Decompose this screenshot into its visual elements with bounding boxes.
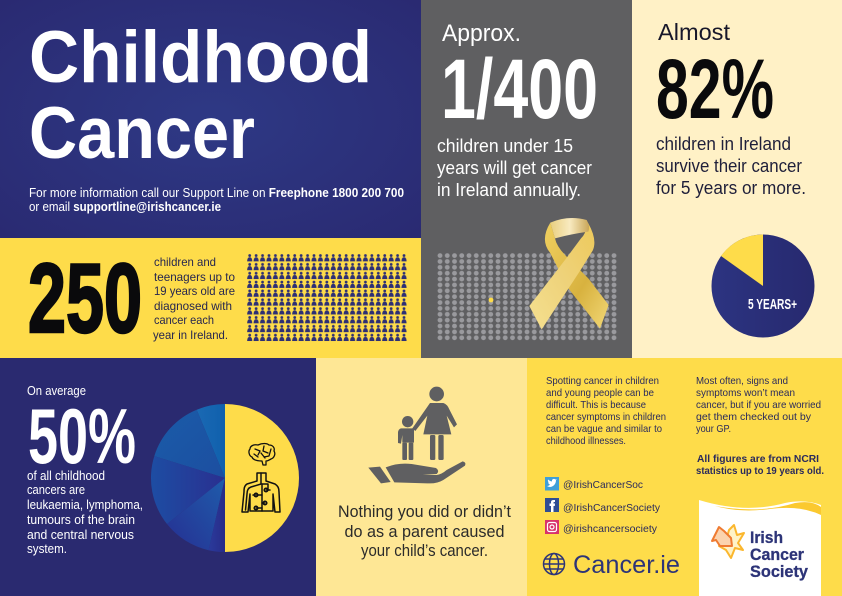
icon: brain (249, 444, 275, 465)
logo wordmark: Irish (750, 528, 783, 547)
icon: instagram (545, 520, 559, 534)
text: 1/400 description: in Ireland annually. (437, 180, 581, 200)
text: 250 description: cancer each (154, 313, 214, 327)
text: figures source: statistics up to 19 years old. (696, 465, 824, 477)
text: spotting cancer: cancer symptoms in children (546, 411, 666, 423)
text: reassurance message: your child’s cancer. (361, 542, 488, 560)
text: survival description: survive their cancer (656, 156, 802, 176)
text: 50% description (27, 469, 143, 556)
text: spotting cancer: difficult. This is because (546, 399, 646, 411)
text: 250 description: year in Ireland. (153, 328, 228, 342)
big number: 250: 250 (28, 243, 142, 353)
icon: facebook (545, 498, 559, 512)
text: 1/400 description: children under 15 (437, 136, 573, 156)
text: 250 description: diagnosed with (154, 299, 232, 313)
logo: Irish Cancer Society (699, 500, 821, 596)
chart: childhood cancers pie (151, 404, 299, 552)
text: figures source (696, 453, 824, 477)
text: facebook handle: @IrishCancerSociety (563, 502, 661, 514)
text: see your GP: cancer, but if you are worried (696, 399, 821, 411)
text: 50% description: and central nervous (27, 528, 134, 542)
text: 50% description: of all childhood (27, 469, 105, 483)
text: figures source: All figures are from NCRI (697, 453, 819, 465)
big number: 82%: 82% (656, 42, 774, 136)
logo wordmark (750, 528, 809, 581)
contact text: For more information call our Support Line on Freephone 1800 200 700 (29, 186, 404, 200)
icon: globe (544, 554, 564, 574)
text: spotting cancer: childhood illnesses. (546, 435, 626, 447)
panel: information background (527, 358, 842, 596)
text: see your GP: your GP. (696, 423, 731, 435)
text: survival description (656, 134, 806, 198)
chart: 82% survival pie (712, 234, 814, 338)
text: reassurance message (338, 503, 511, 560)
text: see your GP: symptoms won’t mean (696, 387, 795, 399)
text: survival description: for 5 years or more. (656, 178, 806, 198)
text: twitter handle: @IrishCancerSoc (563, 479, 643, 491)
text: instagram handle: @irishcancersociety (563, 523, 658, 535)
big number: 1/400: 1/400 (441, 42, 598, 136)
text: 250 description: 19 years old are (154, 284, 235, 298)
text: 50% description: cancers are (27, 483, 85, 497)
text: see your GP: Most often, signs and (696, 375, 788, 387)
text: website: Cancer.ie (573, 551, 680, 579)
pictogram: 250 people (246, 254, 408, 342)
text: spotting cancer (546, 375, 666, 447)
icon: gold ribbon (529, 218, 609, 329)
title: Cancer (29, 93, 255, 174)
icon: parent and child on a hand (368, 387, 465, 483)
text: 250 description: children and (154, 255, 216, 269)
text: 1/400 description: years will get cancer (437, 158, 592, 178)
text: 50% description: leukaemia, lymphoma, (27, 498, 143, 512)
icon: torso (242, 473, 280, 512)
text: 1/400 description (437, 136, 592, 200)
panel: survival background (632, 0, 842, 358)
text: approx: Approx. (442, 20, 521, 47)
text: 250 description: teenagers up to (154, 270, 235, 284)
panel: parent message background (316, 358, 527, 596)
logo wordmark: Cancer (750, 545, 804, 564)
text: spotting cancer: Spotting cancer in children (546, 375, 659, 387)
text: see your GP (696, 375, 821, 435)
title (29, 17, 372, 174)
text: spotting cancer: and young people can be (546, 387, 654, 399)
text: almost: Almost (658, 19, 731, 45)
icon: daffodil (712, 525, 744, 558)
text: reassurance message: Nothing you did or didn’t (338, 503, 511, 521)
title: Childhood (29, 17, 372, 98)
text: survival description: children in Ireland (656, 134, 791, 154)
panel: grey statistic background (421, 0, 632, 358)
text: see your GP: get them checked out by (696, 411, 812, 423)
text: 50% description: system. (27, 542, 67, 556)
icon: twitter (545, 477, 559, 490)
big number: 50%: 50% (28, 392, 136, 480)
contact text: or email supportline@irishcancer.ie (29, 200, 221, 214)
logo wordmark: Society (750, 562, 809, 581)
text: 50% description: tumours of the brain (27, 513, 135, 527)
text: reassurance message: do as a parent caused (344, 523, 504, 541)
contact text (29, 186, 404, 214)
text: 250 description (153, 255, 235, 342)
text: on average: On average (27, 384, 86, 398)
text: spotting cancer: can be vague and similar to (546, 423, 662, 435)
panel: 50% background (0, 358, 316, 596)
chart: 1 in 400 dots (437, 253, 618, 341)
panel: title background (0, 0, 421, 238)
panel: 250 strip background (0, 238, 421, 358)
chart: 82% survival pie: 5 YEARS+ (748, 296, 797, 313)
